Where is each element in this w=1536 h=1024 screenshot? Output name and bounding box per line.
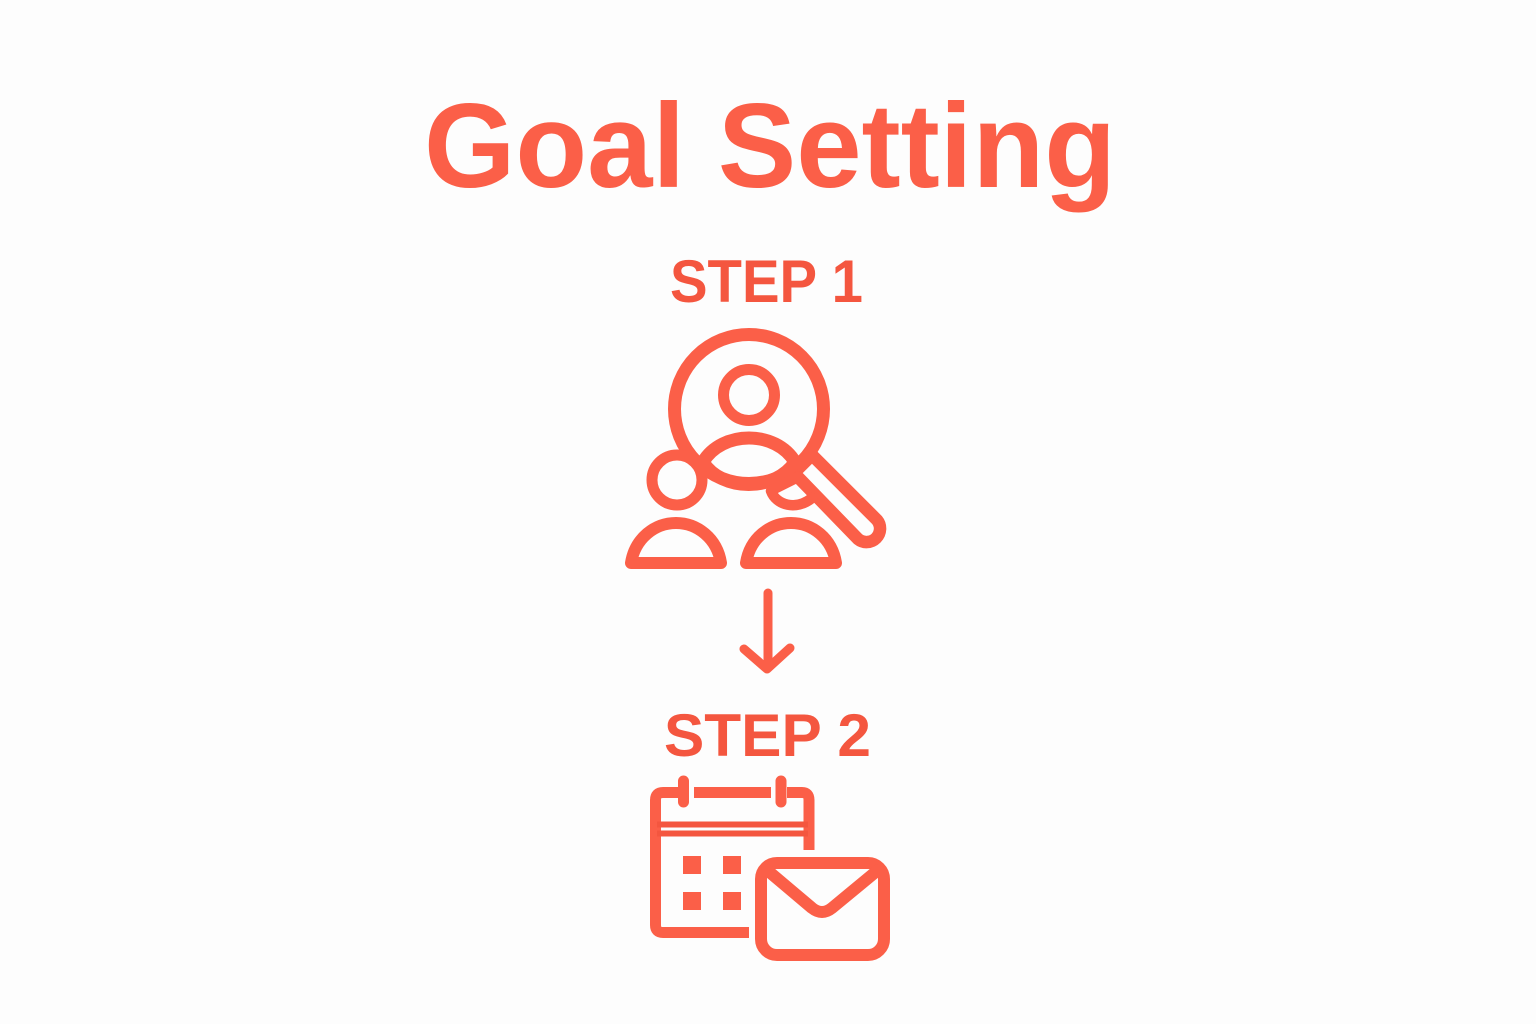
- title: Goal Setting: [424, 79, 1116, 213]
- step 2 label: STEP 2: [664, 702, 871, 769]
- left person head: [652, 455, 702, 505]
- centre person shoulders: [703, 438, 795, 484]
- step 1 label: STEP 1: [670, 248, 863, 315]
- envelope flap: [767, 870, 878, 912]
- left person body: [631, 523, 721, 563]
- arrow: step 1 to step 2: [744, 593, 790, 669]
- icon: calendar and envelope: [656, 781, 884, 955]
- magnifier lens: [674, 334, 824, 484]
- envelope body: [761, 863, 884, 955]
- calendar top bar: [694, 787, 771, 798]
- calendar rings: [684, 781, 781, 802]
- calendar date squares: [683, 856, 741, 910]
- icon: magnifying glass over people: [631, 334, 880, 563]
- calendar header rule: [657, 824, 808, 834]
- right person head: [771, 477, 812, 505]
- magnifier handle: [794, 455, 880, 542]
- calendar frame: [656, 792, 809, 932]
- centre person head: [724, 370, 774, 420]
- right person body: [746, 523, 836, 563]
